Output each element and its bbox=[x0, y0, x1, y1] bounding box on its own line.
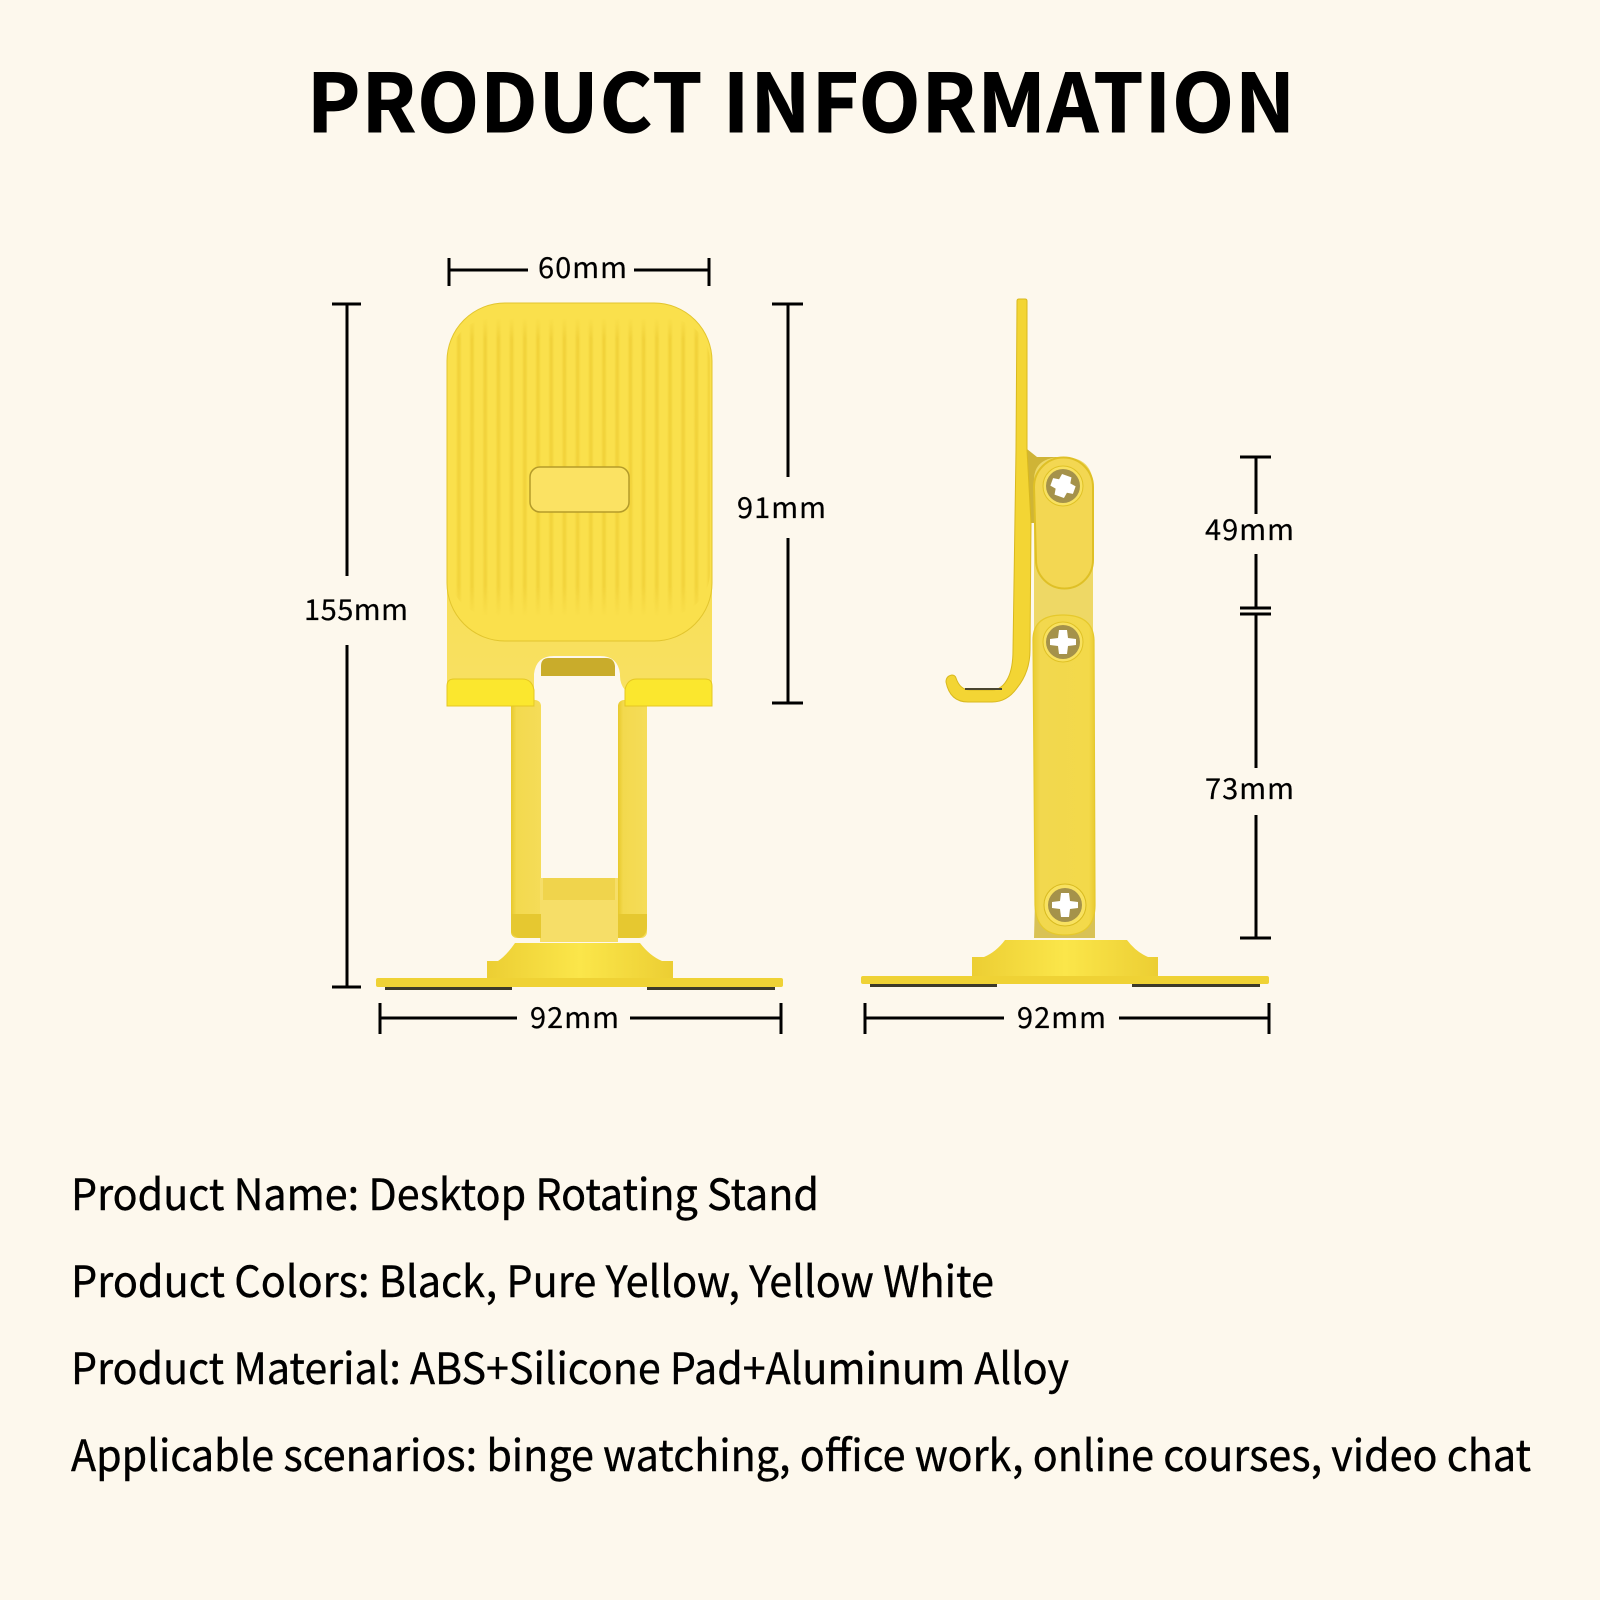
dimension: 49mm: 49mm bbox=[1205, 507, 1294, 549]
left suction pad bbox=[385, 987, 512, 990]
screw: upper bbox=[1043, 466, 1083, 506]
phone holder plate with hook bbox=[946, 299, 1031, 702]
dimension: 60mm: 60mm bbox=[538, 245, 627, 287]
slot bbox=[541, 658, 615, 676]
arm joint bbox=[1034, 457, 1093, 640]
rotating base bbox=[487, 943, 673, 978]
dimension: 60mm bbox=[449, 245, 709, 287]
front view of stand bbox=[376, 303, 783, 990]
right foot lip bbox=[625, 679, 712, 706]
left support arm bbox=[511, 700, 541, 938]
right suction pad bbox=[647, 987, 775, 990]
applicable scenarios text: Applicable scenarios: binge watching, office work, online courses, video chat bbox=[71, 1422, 1531, 1484]
dimension: 92mm front bbox=[380, 995, 781, 1037]
dimension: 73mm: 73mm bbox=[1205, 766, 1294, 808]
dimension: 92mm side: 92mm bbox=[1017, 995, 1106, 1037]
right pad side bbox=[1132, 984, 1260, 987]
dimension: 91mm bbox=[737, 304, 826, 703]
product material text: Product Material: ABS+Silicone Pad+Aluminum Alloy bbox=[71, 1335, 1069, 1397]
title: PRODUCT INFORMATION bbox=[307, 40, 1295, 156]
left pad side bbox=[870, 984, 997, 987]
dimension: 49mm bbox=[1205, 457, 1294, 608]
center button bbox=[530, 467, 629, 512]
base hub side bbox=[972, 940, 1158, 976]
screw: middle bbox=[1043, 622, 1083, 662]
upper capsule link bbox=[1034, 458, 1093, 588]
base plate bbox=[376, 978, 783, 987]
dimension: 73mm bbox=[1205, 614, 1294, 938]
left foot lip bbox=[447, 679, 534, 706]
lower long arm bbox=[1033, 615, 1095, 935]
side view of stand bbox=[861, 299, 1269, 987]
dimension: 91mm: 91mm bbox=[737, 485, 826, 527]
right support arm bbox=[618, 700, 647, 938]
base plate side bbox=[861, 976, 1269, 984]
panel back bbox=[447, 303, 712, 706]
product colors text: Product Colors: Black, Pure Yellow, Yellow White bbox=[71, 1248, 994, 1310]
rear wedge bbox=[1027, 449, 1060, 523]
dimension: 155mm bbox=[304, 304, 408, 987]
panel front with ribs bbox=[447, 303, 712, 641]
dimension: 92mm front: 92mm bbox=[530, 995, 619, 1037]
hinge block bbox=[511, 878, 647, 942]
dimension: 92mm side bbox=[865, 995, 1269, 1037]
dimension: 155mm: 155mm bbox=[304, 587, 408, 629]
hook rubber pad bbox=[965, 688, 1002, 690]
screw: lower bbox=[1044, 884, 1086, 926]
product name text: Product Name: Desktop Rotating Stand bbox=[71, 1161, 819, 1223]
lower arm shadow bbox=[1034, 900, 1095, 938]
